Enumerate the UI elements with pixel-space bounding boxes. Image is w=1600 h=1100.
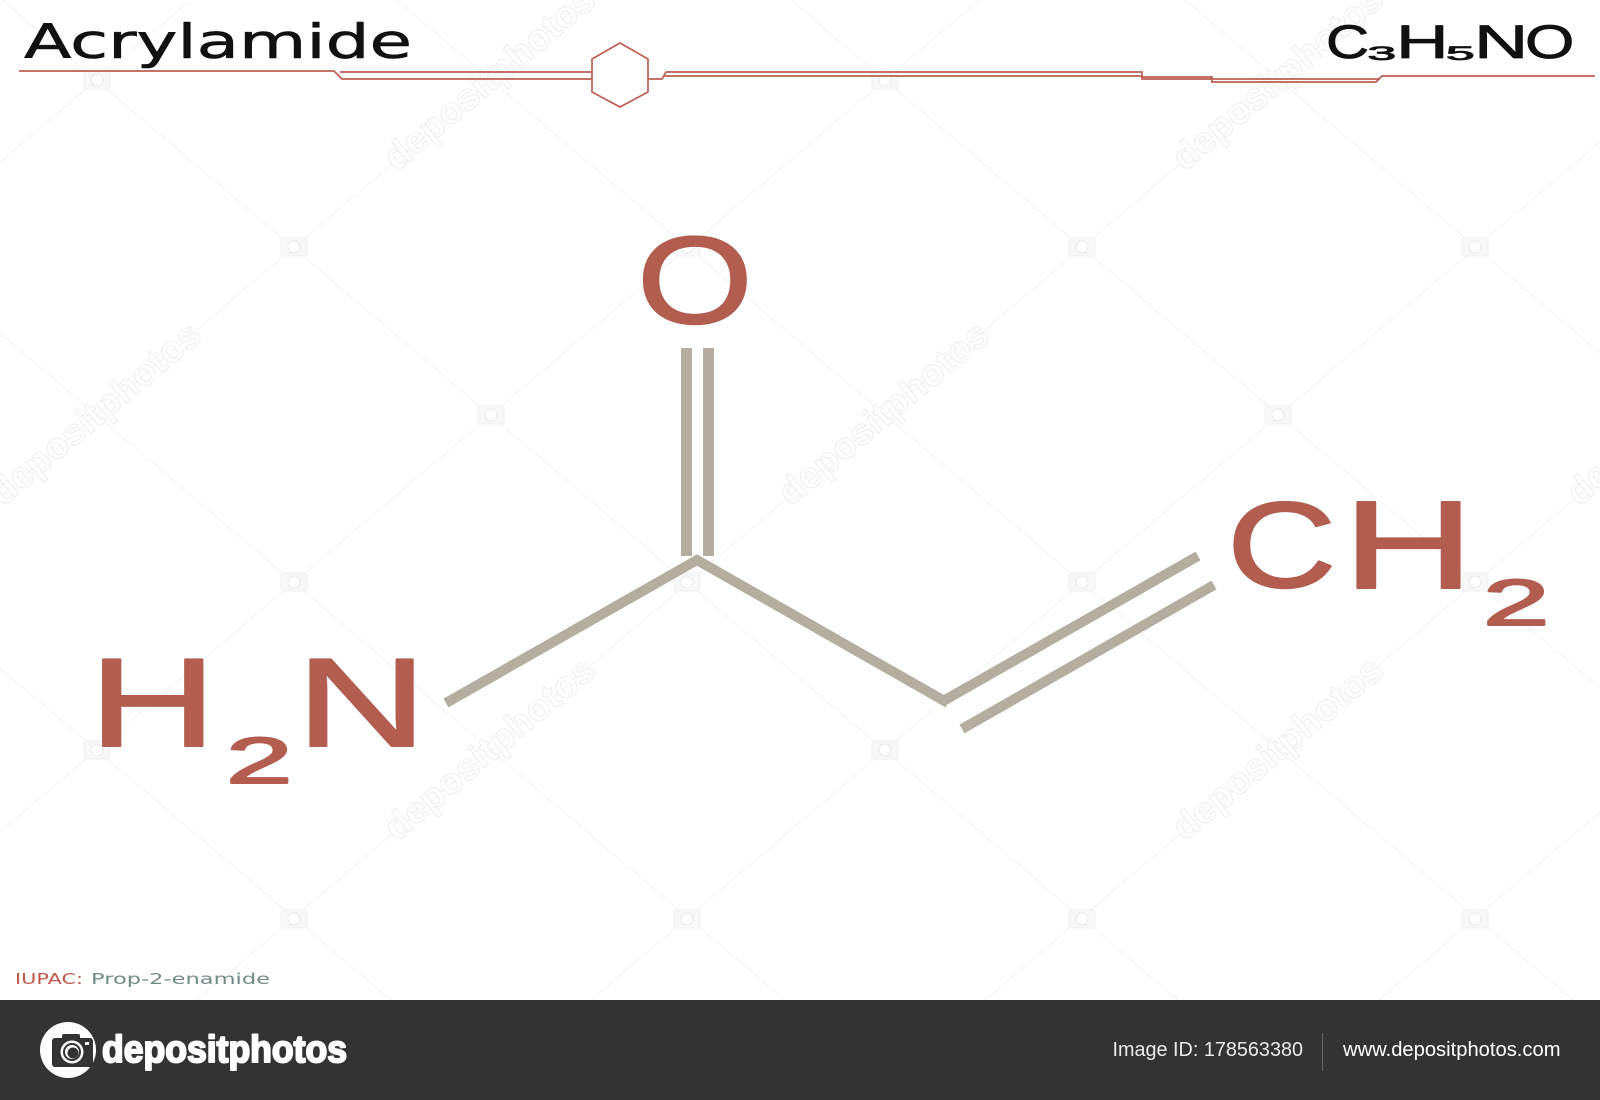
chemical formula [1326,15,1574,68]
website: www.depositphotos.com [1342,1039,1560,1061]
atom label: CH2 [1227,475,1550,639]
atom label: CH2: 2 [1483,567,1550,639]
chemical formula: H [1396,16,1449,68]
atom label: H2N: H [89,633,216,773]
icon: camera logo [40,1022,96,1078]
watermark: faint lattice, camera marks and diagonal wordmarks: depositphotos [770,313,997,513]
bond: C=CH2 double bond [945,556,1214,729]
atom label: H2N: N [296,633,427,773]
logo wordmark: depositphotos [102,1029,347,1071]
IUPAC name [15,970,270,988]
header rule with hexagon [19,43,1595,107]
chemical formula: N [1474,16,1528,68]
bond: C=O double bond [686,348,708,556]
title: Acrylamide [24,15,412,70]
chemical formula: C [1326,16,1369,68]
atom label: O: O [637,212,753,350]
watermark: faint lattice, camera marks and diagonal wordmarks: depositphotos [1164,648,1391,848]
IUPAC name: IUPAC: [15,970,83,988]
watermark: faint lattice, camera marks and diagonal wordmarks: depositphotos [376,648,603,848]
atom label: H2N: 2 [226,725,293,797]
chemical formula: 5 [1446,43,1475,64]
IUPAC name: Prop-2-enamide [91,970,270,988]
bond: NH2 to carbon to CH [446,560,948,703]
image id: Image ID: 178563380 [1112,1039,1303,1061]
chemical formula: 3 [1368,43,1396,64]
molecule bonds [446,348,1214,729]
footer bar [0,1000,1600,1100]
atom label: CH2: H [1343,475,1474,614]
chemical formula: O [1525,15,1574,68]
atom label: CH2: C [1227,478,1336,614]
atom label: H2N [89,633,427,797]
